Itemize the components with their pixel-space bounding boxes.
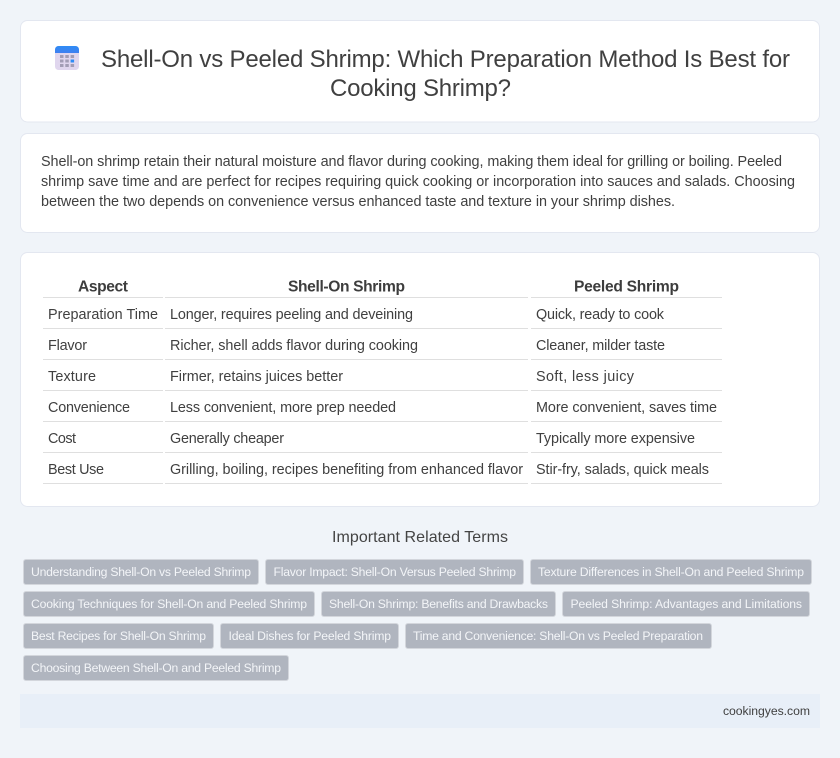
row: preparation time: Longer, requires peeling and deveining [170, 307, 413, 323]
row: convenience: Less convenient, more prep needed [170, 400, 396, 416]
title: Shell-On vs Peeled Shrimp: Which Preparation Method Is Best for [101, 46, 790, 73]
tags: related terms: Ideal Dishes for Peeled Shrimp [228, 629, 391, 643]
row: convenience [48, 400, 717, 416]
panel: comparison table [20, 252, 820, 506]
tags: related terms: Understanding Shell-On vs Peeled Shrimp [31, 565, 251, 579]
heading: important related terms: Important Related Terms [332, 529, 508, 546]
tags: related terms: Choosing Between Shell-On and Peeled Shrimp [31, 661, 281, 675]
row: best use: Stir-fry, salads, quick meals [536, 462, 709, 478]
text block: intro paragraph [41, 154, 795, 210]
footer: cookingyes.com [723, 704, 810, 718]
row: flavor: Flavor [48, 338, 87, 354]
tags: related terms: Shell-On Shrimp: Benefits and Drawbacks [329, 597, 548, 611]
row: flavor: Richer, shell adds flavor during cooking [170, 338, 418, 354]
row: texture: Firmer, retains juices better [170, 369, 343, 385]
row: cost: Generally cheaper [170, 431, 284, 447]
icon: calendar [55, 46, 79, 70]
row: convenience: Convenience [48, 400, 130, 416]
tags: related terms: Flavor Impact: Shell-On Versus Peeled Shrimp [274, 565, 516, 579]
row: flavor: Cleaner, milder taste [536, 338, 665, 354]
row: convenience: More convenient, saves time [536, 400, 717, 416]
text block: intro paragraph: shrimp save time and are perfect for recipes requiring quick cooking or incorporation into sauces and salads. Choosing [41, 174, 795, 190]
table header: Peeled Shrimp [574, 278, 679, 296]
row: cost: Cost [48, 431, 76, 447]
tags: related terms: Texture Differences in Shell-On and Peeled Shrimp [538, 565, 804, 579]
tags: related terms: Cooking Techniques for Shell-On and Peeled Shrimp [31, 597, 307, 611]
panel: introduction [20, 134, 820, 232]
text block: intro paragraph: Shell-on shrimp retain their natural moisture and flavor during cooking, making them ideal for grilling or boiling. Peeled [41, 154, 782, 170]
table header: Shell-On Shrimp [288, 278, 405, 296]
row: texture: Soft, less juicy [536, 369, 635, 385]
table header: Aspect [78, 278, 128, 296]
row: cost [48, 431, 695, 447]
row: preparation time [48, 307, 665, 323]
title: Cooking Shrimp? [330, 75, 511, 102]
row: preparation time: Quick, ready to cook [536, 307, 665, 323]
tags: related terms: Best Recipes for Shell-On Shrimp [31, 629, 206, 643]
tags: related terms [24, 560, 812, 680]
footer [20, 694, 820, 728]
row: flavor [48, 338, 665, 354]
title [101, 46, 790, 102]
panel: header [20, 20, 820, 122]
row: preparation time: Preparation Time [48, 307, 158, 323]
row: best use [48, 462, 709, 478]
text block: intro paragraph: between the two depends on convenience versus enhanced taste and texture in your shrimp dishes. [41, 194, 675, 210]
row: texture: Texture [48, 369, 96, 385]
tags: related terms: Time and Convenience: Shell-On vs Peeled Preparation [413, 629, 703, 643]
row: best use: Best Use [48, 462, 104, 478]
row: best use: Grilling, boiling, recipes benefiting from enhanced flavor [170, 462, 523, 478]
row: cost: Typically more expensive [536, 431, 695, 447]
table header [78, 278, 679, 296]
row: texture [48, 369, 635, 385]
tags: related terms: Peeled Shrimp: Advantages and Limitations [570, 597, 802, 611]
